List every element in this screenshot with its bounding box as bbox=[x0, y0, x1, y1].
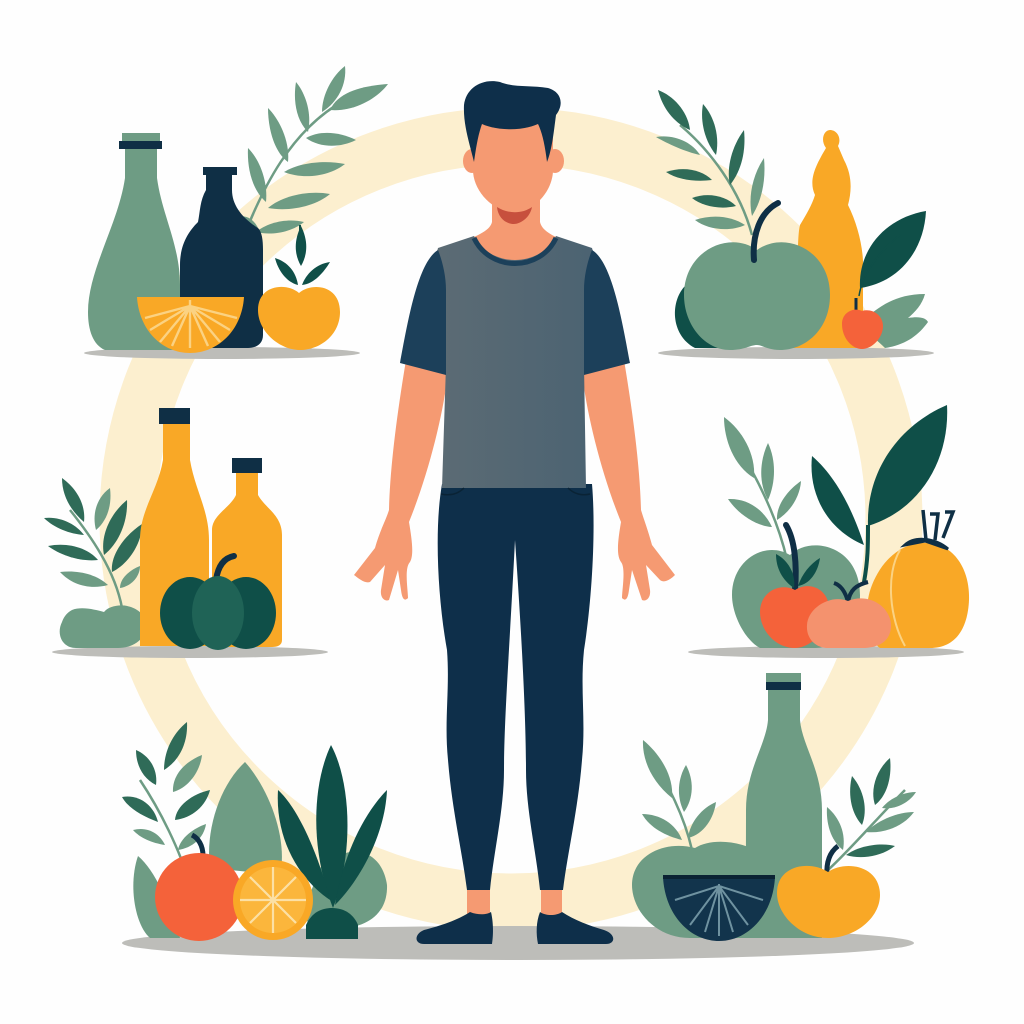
branch top left bbox=[240, 66, 388, 238]
sleeves bbox=[400, 250, 630, 375]
big dark leaf bbox=[859, 211, 926, 296]
branch top right bbox=[656, 90, 764, 235]
collar bbox=[474, 238, 556, 264]
leggings bbox=[438, 484, 594, 890]
green leaves right bbox=[862, 294, 928, 348]
flask cap bbox=[119, 133, 162, 149]
sage stones bbox=[60, 605, 146, 648]
large orange squash bbox=[867, 510, 969, 648]
orange apple bbox=[258, 287, 340, 350]
orange slice bbox=[233, 860, 313, 940]
pocket lines bbox=[441, 488, 590, 495]
short orange bottle bbox=[212, 458, 282, 647]
dark green pumpkin bbox=[160, 556, 276, 650]
shirt bbox=[424, 236, 607, 488]
shelf shadow top left bbox=[84, 347, 360, 359]
person figure bbox=[354, 81, 675, 944]
orange gourd bottle bbox=[790, 130, 863, 348]
ground shadow bbox=[122, 926, 914, 960]
face bbox=[473, 120, 553, 212]
dark leaf shadow behind apple bbox=[675, 285, 725, 348]
red orange fruit bbox=[155, 835, 243, 941]
shelf: top left group bbox=[84, 66, 388, 359]
small sage leaf left bbox=[133, 856, 180, 938]
large dark leaves bbox=[811, 405, 947, 582]
neck bbox=[472, 190, 558, 264]
sage leaf backdrop bbox=[209, 762, 282, 875]
branch middle right bbox=[724, 417, 801, 560]
ears bbox=[463, 149, 564, 173]
branch bottom right bbox=[827, 758, 916, 870]
sprout on apple bbox=[275, 225, 330, 285]
dark green plant bbox=[278, 745, 387, 939]
peach fruit bbox=[807, 582, 891, 648]
small red apple bbox=[842, 298, 883, 349]
navy bottle bbox=[180, 167, 263, 348]
red apple with sprout bbox=[760, 525, 829, 648]
orange apple bottom bbox=[777, 846, 880, 938]
left arm bbox=[354, 360, 448, 601]
shelf: top right group bbox=[656, 90, 934, 359]
dark citrus wedge bbox=[663, 875, 775, 941]
branch middle left bbox=[44, 478, 142, 608]
sage bush right bbox=[300, 852, 387, 928]
apple stem bbox=[754, 203, 778, 260]
sage apple bottom bbox=[632, 842, 780, 938]
sage bottle bbox=[746, 673, 822, 938]
hair bbox=[464, 81, 561, 162]
large sage apple bbox=[732, 545, 860, 648]
shelf shadow middle left bbox=[52, 646, 328, 658]
shelf: middle left group bbox=[44, 408, 328, 658]
branch bottom right left side bbox=[642, 740, 716, 850]
citrus wedge bbox=[137, 297, 244, 353]
sage apple bbox=[684, 242, 830, 350]
background ring bbox=[128, 136, 894, 902]
shelf: middle right group bbox=[688, 405, 969, 658]
shoes bbox=[416, 912, 613, 944]
shelf shadow middle right bbox=[688, 646, 964, 658]
tall orange bottle bbox=[140, 408, 209, 646]
shelf: bottom group bbox=[122, 673, 916, 960]
chin shadow bbox=[497, 207, 532, 224]
right arm bbox=[582, 360, 675, 601]
sage flask bbox=[88, 148, 180, 350]
shelf shadow top right bbox=[658, 347, 934, 359]
ankles bbox=[467, 880, 562, 920]
branch bottom left bbox=[122, 722, 210, 885]
